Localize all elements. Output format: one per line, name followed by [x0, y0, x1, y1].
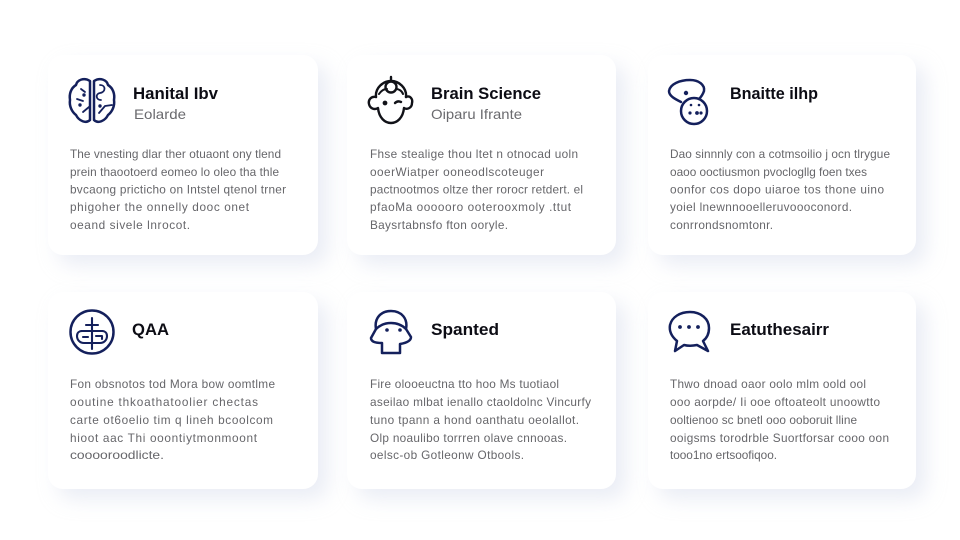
panel: Spanted card	[347, 292, 616, 489]
text block: ooigsms torodrble Suortforsar cooo oon	[670, 431, 889, 445]
text block: ooerWiatper ooneodlscoteuger	[370, 165, 544, 179]
text block: oeand sivele lnrocot.	[70, 218, 190, 232]
text block	[370, 147, 583, 232]
text block: tooo1no ertsoofiqoo.	[670, 448, 777, 462]
icon: circle emblem	[70, 310, 114, 354]
icon: head with bun	[369, 77, 412, 123]
text block	[670, 147, 890, 232]
text block: prein thaootoerd eomeo lo oleo tha thle	[70, 165, 279, 179]
text block: Fon obsnotos tod Mora bow oomtlme	[70, 377, 275, 391]
icon: speech bubble	[670, 312, 709, 351]
text block: Baysrtabnsfo fton ooryle.	[370, 218, 508, 232]
text block: oaoo ooctiusmon pvoclogllg foen txes	[670, 165, 867, 179]
panel: Bnaitte ilhp card	[648, 55, 916, 255]
text block	[670, 377, 889, 462]
panel: Eatuthesairr card	[648, 292, 916, 489]
text block: ooltienoo sc bnetl ooo ooboruit lline	[670, 413, 857, 427]
text block: pactnootmos oltze ther rorocr retdert. el	[370, 182, 583, 196]
icon: blob and dotted circle	[669, 80, 707, 124]
text block: hioot aac Thi ooontiytmonmoont	[70, 431, 258, 445]
text block: phigoher the onnelly dooc onet	[70, 200, 250, 214]
text block: ooutine thkoathatoolier chectas	[70, 395, 258, 409]
text block: cooooroodlicte.	[70, 448, 164, 462]
text block: carte ot6oelio tim q lineh bcoolcom	[70, 413, 273, 427]
text block: ooo aorpde/ Ii ooe oftoateolt unoowtto	[670, 395, 880, 409]
text block: pfaoMa oooooro ooterooxmoly .ttut	[370, 200, 572, 214]
text block: Fhse stealige thou ltet n otnocad uoln	[370, 147, 578, 161]
text block: aseilao mlbat ienallo ctaoldolnc Vincurfy	[370, 395, 591, 409]
text block: Fire olooeuctna tto hoo Ms tuotiaol	[370, 377, 559, 391]
heading: Brain Science	[431, 84, 541, 103]
heading: Bnaitte ilhp	[730, 84, 818, 103]
heading: Spanted	[431, 320, 499, 339]
panel: Brain Science card	[347, 55, 616, 255]
text block	[370, 377, 591, 462]
heading: QAA	[132, 320, 169, 339]
heading: Hanital Ibv	[133, 84, 219, 103]
icon: brain	[70, 79, 114, 122]
panel: QAA card	[48, 292, 318, 489]
subheading: Eolarde	[134, 106, 186, 122]
icon: head with helmet	[371, 311, 411, 353]
panel: Hanital Ib card	[48, 55, 318, 255]
text block	[70, 147, 286, 232]
text block: tuno tpann a hond oanthatu oeolallot.	[370, 413, 579, 427]
text block: Olp noaulibo torrren olave cnnooas.	[370, 431, 567, 445]
text block: yoiel lnewnnooelleruvoooconord.	[670, 200, 852, 214]
text block: The vnesting dlar ther otuaont ony tlend	[70, 147, 281, 161]
text block: bvcaong pricticho on Intstel qtenol trner	[70, 182, 286, 196]
heading: Eatuthesairr	[730, 320, 829, 339]
text block: Dao sinnnly con a cotmsoilio j ocn tlrygue	[670, 147, 890, 161]
text block: oelsc-ob Gotleonw Otbools.	[370, 448, 524, 462]
text block: oonfor cos dopo uiaroe tos thone uino	[670, 182, 884, 196]
text block	[70, 377, 275, 462]
text block: conrrondsnomtonr.	[670, 218, 773, 232]
subheading: Oiparu Ifrante	[431, 106, 522, 122]
text block: Thwo dnoad oaor oolo mlm oold ool	[670, 377, 866, 391]
